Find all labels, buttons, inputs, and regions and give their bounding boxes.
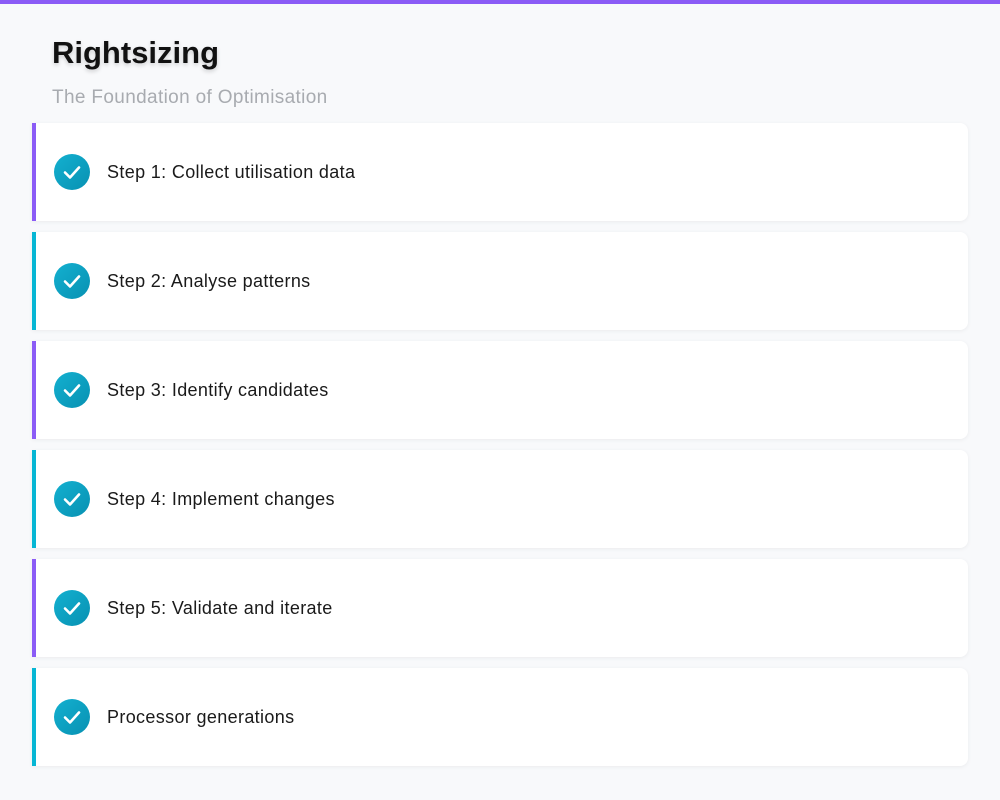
icon: check (54, 481, 90, 517)
label: Step 2: Analyse patterns (107, 271, 311, 291)
card: processor generations (32, 668, 968, 766)
label: Step 3: Identify candidates (107, 380, 329, 400)
icon: check (54, 154, 90, 190)
card: step 4 (32, 450, 968, 548)
icon: check (54, 699, 90, 735)
title: Rightsizing (52, 35, 219, 70)
label: Step 5: Validate and iterate (107, 598, 333, 618)
icon: check (54, 263, 90, 299)
card: step 2 (32, 232, 968, 330)
label: Step 1: Collect utilisation data (107, 162, 355, 182)
subtitle: The Foundation of Optimisation (52, 87, 328, 108)
card: step 5 (32, 559, 968, 657)
label: Processor generations (107, 707, 294, 727)
label: Step 4: Implement changes (107, 489, 335, 509)
card: step 1 (32, 123, 968, 221)
icon: check (54, 590, 90, 626)
icon: check (54, 372, 90, 408)
card: step 3 (32, 341, 968, 439)
